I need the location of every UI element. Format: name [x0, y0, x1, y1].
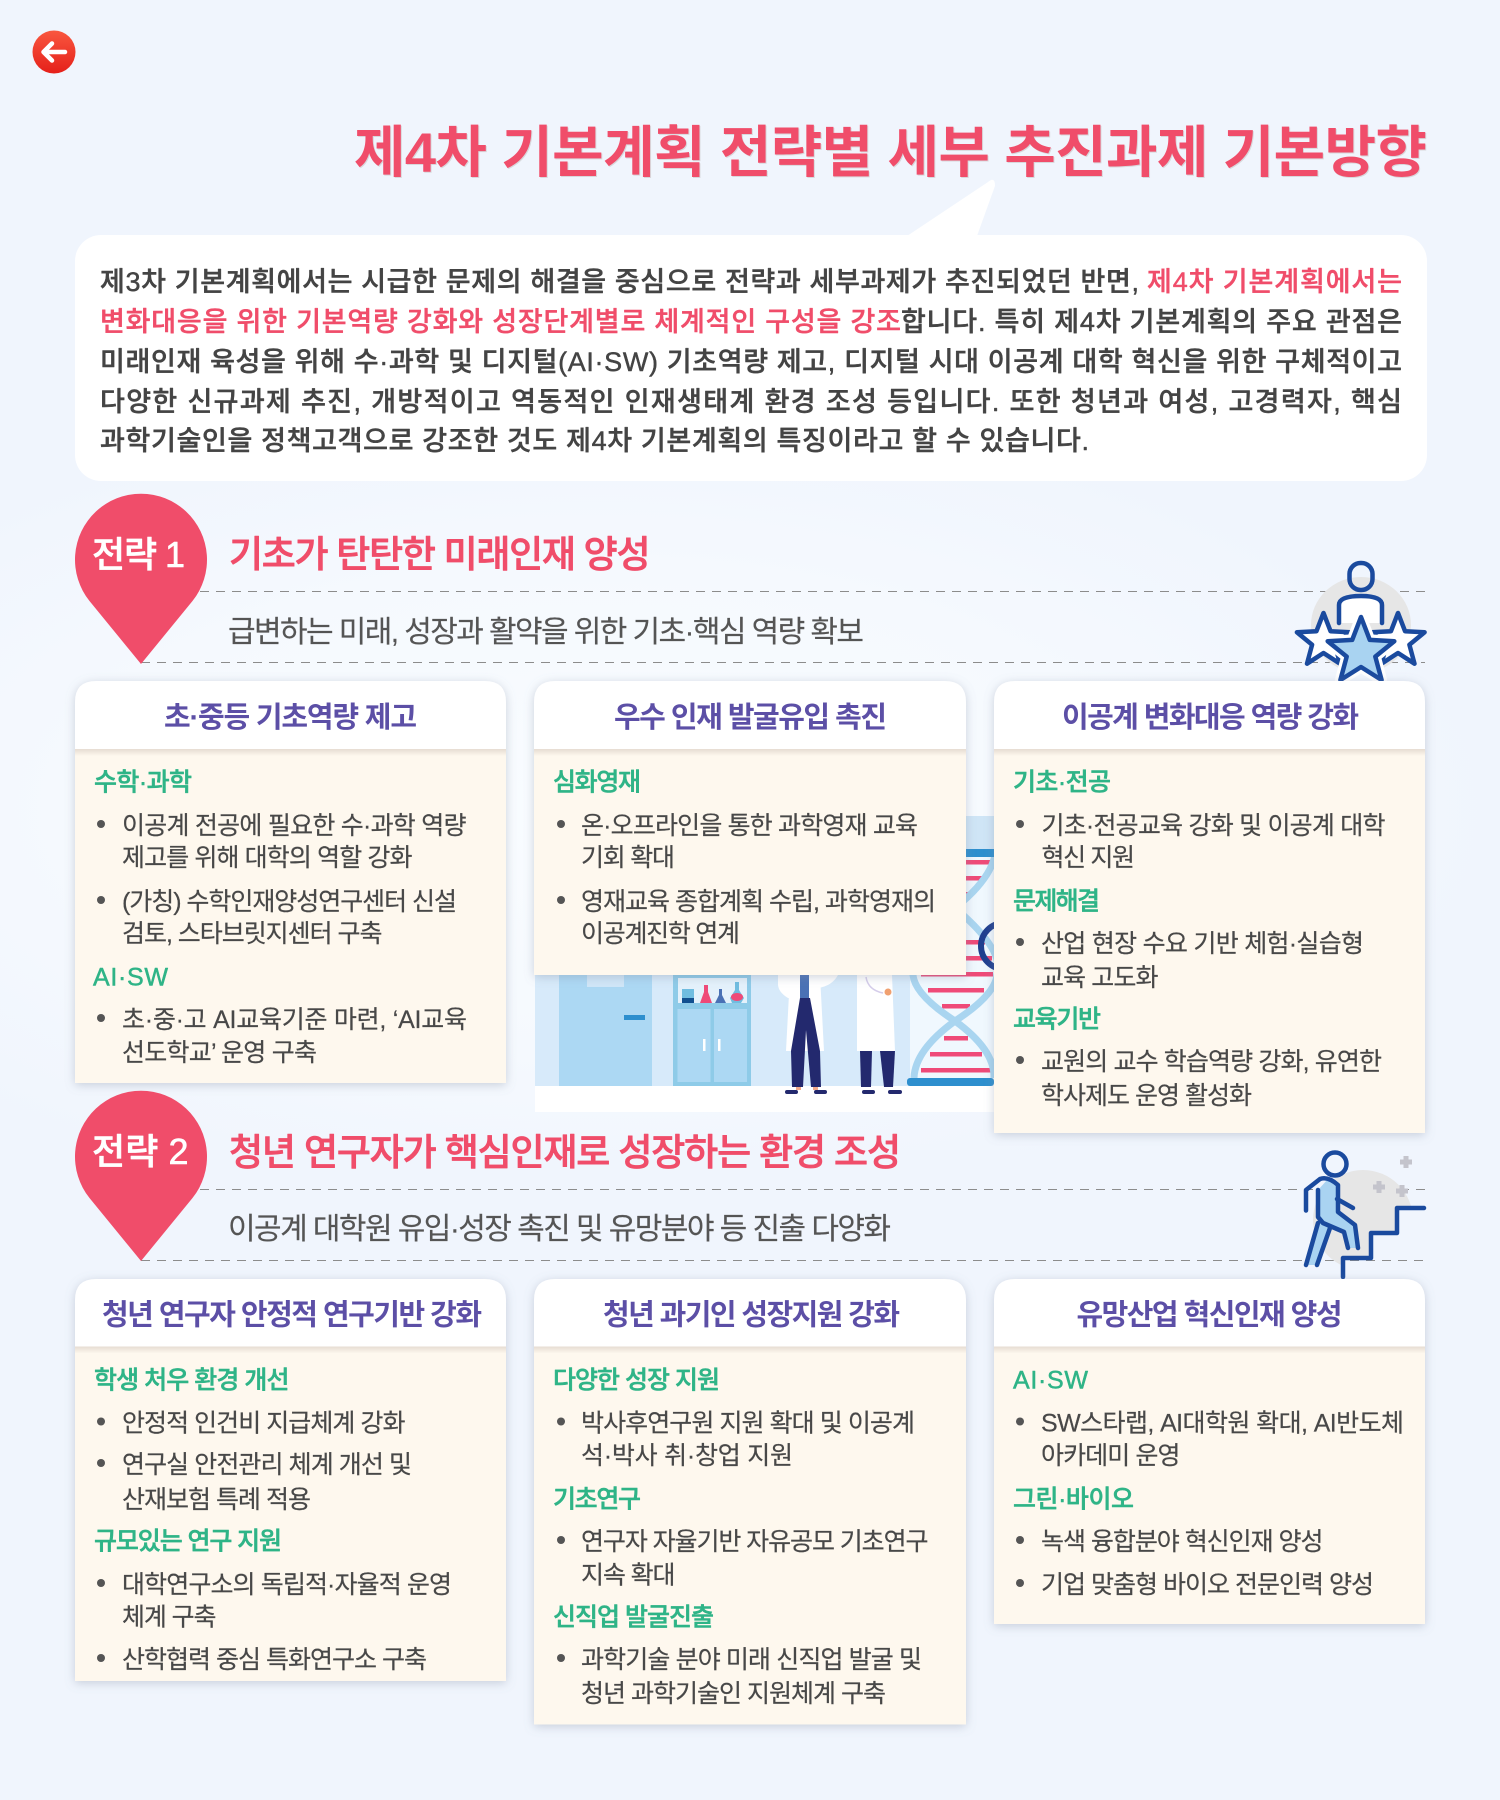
strategy 1 header: 급변하는 미래, 성장과 활약을 위한 기초·핵심 역량 확보 — [228, 616, 864, 649]
panel: 이공계 변화대응 역량 강화: 문제해결 — [1013, 888, 1100, 916]
panel: 청년 연구자 안정적 연구기반 강화: 대학연구소의 독립적·자율적 운영 — [122, 1571, 452, 1599]
panel: intro speech bubble — [75, 180, 1427, 481]
panel: 우수 인재 발굴유입 촉진: 온·오프라인을 통한 과학영재 교육 — [581, 812, 918, 840]
panel: 청년 과기인 성장지원 강화: 기초연구 — [553, 1486, 641, 1514]
panel: 유망산업 혁신인재 양성: 녹색 융합분야 혁신인재 양성 — [1041, 1528, 1324, 1556]
panel: 유망산업 혁신인재 양성 — [994, 1279, 1425, 1624]
panel: 이공계 변화대응 역량 강화: 기초·전공교육 강화 및 이공계 대학 — [1042, 812, 1386, 840]
panel: 우수 인재 발굴유입 촉진: 우수 인재 발굴유입 촉진 — [614, 701, 887, 734]
panel: 우수 인재 발굴유입 촉진: 이공계진학 연계 — [581, 920, 740, 948]
panel: 청년 과기인 성장지원 강화: 지속 확대 — [581, 1562, 676, 1590]
panel: 유망산업 혁신인재 양성: AI·SW — [1013, 1366, 1088, 1394]
panel: intro speech bubble: 합니다. 특히 제4차 기본계획의 주요 관점은 — [901, 307, 1402, 337]
panel: 청년 연구자 안정적 연구기반 강화: 연구실 안전관리 체계 개선 및 — [122, 1451, 412, 1479]
panel: 유망산업 혁신인재 양성: 그린·바이오 — [1013, 1486, 1134, 1514]
panel: intro speech bubble: 제3차 기본계획에서는 시급한 문제의 해결을 중심으로 전략과 세부과제가 추진되었던 반면, — [100, 267, 1139, 297]
strategy 2 header — [75, 1091, 1425, 1261]
strategy 2 header: 전략 2 — [92, 1131, 188, 1172]
panel: 청년 과기인 성장지원 강화: 박사후연구원 지원 확대 및 이공계 — [581, 1410, 915, 1438]
illustration: scientists in a laboratory with DNA — [535, 816, 1027, 1112]
panel: 이공계 변화대응 역량 강화: 교육 고도화 — [1041, 964, 1158, 992]
panel: 청년 연구자 안정적 연구기반 강화: 산학협력 중심 특화연구소 구축 — [122, 1646, 427, 1674]
panel: 유망산업 혁신인재 양성: 기업 맞춤형 바이오 전문인력 양성 — [1041, 1571, 1374, 1599]
panel: 이공계 변화대응 역량 강화: 산업 현장 수요 기반 체험·실습형 — [1041, 930, 1364, 958]
panel: intro speech bubble: 미래인재 육성을 위해 수·과학 및 디지털(AI·SW) 기초역량 제고, 디지털 시대 이공계 대학 혁신을 위한 구체적이고 — [100, 347, 1402, 377]
panel: 청년 과기인 성장지원 강화: 신직업 발굴진출 — [553, 1604, 714, 1632]
panel: intro speech bubble: 변화대응을 위한 기본역량 강화와 성장단계별로 체계적인 구성을 강조 — [100, 307, 901, 337]
panel: 우수 인재 발굴유입 촉진: 심화영재 — [553, 768, 641, 796]
panel: 청년 연구자 안정적 연구기반 강화: 규모있는 연구 지원 — [94, 1528, 282, 1556]
panel: 우수 인재 발굴유입 촉진 — [534, 681, 966, 975]
panel: 우수 인재 발굴유입 촉진: 기회 확대 — [581, 844, 675, 872]
panel: 청년 과기인 성장지원 강화: 청년 과학기술인 지원체계 구축 — [581, 1680, 886, 1708]
panel: 초·중등 기초역량 제고: 초·중·고 AI교육기준 마련, ‘AI교육 — [122, 1006, 467, 1034]
panel: 청년 과기인 성장지원 강화 — [534, 1279, 966, 1724]
strategy 2 header: 이공계 대학원 유입·성장 촉진 및 유망분야 등 진출 다양화 — [228, 1213, 891, 1246]
panel: 이공계 변화대응 역량 강화: 이공계 변화대응 역량 강화 — [1062, 701, 1359, 734]
panel: 유망산업 혁신인재 양성: SW스타랩, AI대학원 확대, AI반도체 — [1041, 1410, 1404, 1438]
panel: 초·중등 기초역량 제고: (가칭) 수학인재양성연구센터 신설 — [122, 888, 457, 916]
panel: 청년 과기인 성장지원 강화: 다양한 성장 지원 — [553, 1366, 720, 1394]
panel: 청년 연구자 안정적 연구기반 강화: 청년 연구자 안정적 연구기반 강화 — [102, 1298, 482, 1332]
strategy 1 header — [75, 494, 1425, 664]
panel: intro speech bubble: 과학기술인을 정책고객으로 강조한 것도 제4차 기본계획의 특징이라고 할 수 있습니다. — [100, 426, 1089, 456]
panel: 우수 인재 발굴유입 촉진: 영재교육 종합계획 수립, 과학영재의 — [581, 888, 936, 916]
panel: 이공계 변화대응 역량 강화: 혁신 지원 — [1042, 844, 1135, 872]
panel: 초·중등 기초역량 제고: 검토, 스타브릿지센터 구축 — [122, 920, 382, 948]
panel: 초·중등 기초역량 제고 — [75, 681, 506, 1083]
panel: 이공계 변화대응 역량 강화: 기초·전공 — [1013, 768, 1111, 796]
panel: 청년 연구자 안정적 연구기반 강화: 학생 처우 환경 개선 — [94, 1366, 290, 1394]
back button icon — [32, 30, 76, 74]
panel: 초·중등 기초역량 제고: 제고를 위해 대학의 역할 강화 — [122, 844, 412, 872]
panel: 청년 과기인 성장지원 강화: 연구자 자율기반 자유공모 기초연구 — [581, 1528, 928, 1556]
panel: 초·중등 기초역량 제고: 수학·과학 — [94, 768, 192, 796]
panel: 청년 연구자 안정적 연구기반 강화: 산재보험 특례 적용 — [122, 1486, 311, 1514]
panel: 청년 연구자 안정적 연구기반 강화: 체계 구축 — [122, 1604, 216, 1632]
panel: 초·중등 기초역량 제고: 선도학교’ 운영 구축 — [122, 1039, 317, 1067]
panel: 청년 연구자 안정적 연구기반 강화: 안정적 인건비 지급체계 강화 — [122, 1410, 406, 1438]
panel: 유망산업 혁신인재 양성: 유망산업 혁신인재 양성 — [1076, 1298, 1342, 1332]
strategy 2 header: 청년 연구자가 핵심인재로 성장하는 환경 조성 — [229, 1132, 901, 1173]
panel: 이공계 변화대응 역량 강화: 학사제도 운영 활성화 — [1041, 1082, 1252, 1110]
panel: 청년 과기인 성장지원 강화: 청년 과기인 성장지원 강화 — [603, 1298, 900, 1332]
strategy 1 header: 기초가 탄탄한 미래인재 양성 — [229, 534, 650, 575]
panel: intro speech bubble: 다양한 신규과제 추진, 개방적이고 역동적인 인재생태계 환경 조성 등입니다. 또한 청년과 여성, 고경력자, 핵심 — [100, 387, 1402, 417]
panel: 청년 과기인 성장지원 강화: 과학기술 분야 미래 신직업 발굴 및 — [581, 1646, 922, 1674]
panel: 이공계 변화대응 역량 강화 — [994, 681, 1425, 1133]
icon: person climbing stairs — [1306, 1152, 1440, 1278]
panel: 초·중등 기초역량 제고: AI·SW — [93, 964, 168, 992]
panel: 이공계 변화대응 역량 강화: 교육기반 — [1013, 1006, 1101, 1034]
strategy 1 header: 전략 1 — [92, 534, 185, 575]
title: 제4차 기본계획 전략별 세부 추진과제 기본방향 — [354, 121, 1427, 184]
panel: 유망산업 혁신인재 양성: 아카데미 운영 — [1041, 1442, 1180, 1470]
panel: 이공계 변화대응 역량 강화: 교원의 교수 학습역량 강화, 유연한 — [1041, 1048, 1382, 1076]
icon: person with stars — [1297, 563, 1425, 680]
panel: 초·중등 기초역량 제고: 초·중등 기초역량 제고 — [164, 701, 417, 734]
panel: 초·중등 기초역량 제고: 이공계 전공에 필요한 수·과학 역량 — [122, 812, 466, 840]
panel: 청년 연구자 안정적 연구기반 강화 — [75, 1279, 506, 1681]
panel: intro speech bubble: 제4차 기본계획에서는 — [1147, 267, 1402, 297]
panel: 청년 과기인 성장지원 강화: 석·박사 취·창업 지원 — [581, 1442, 793, 1470]
